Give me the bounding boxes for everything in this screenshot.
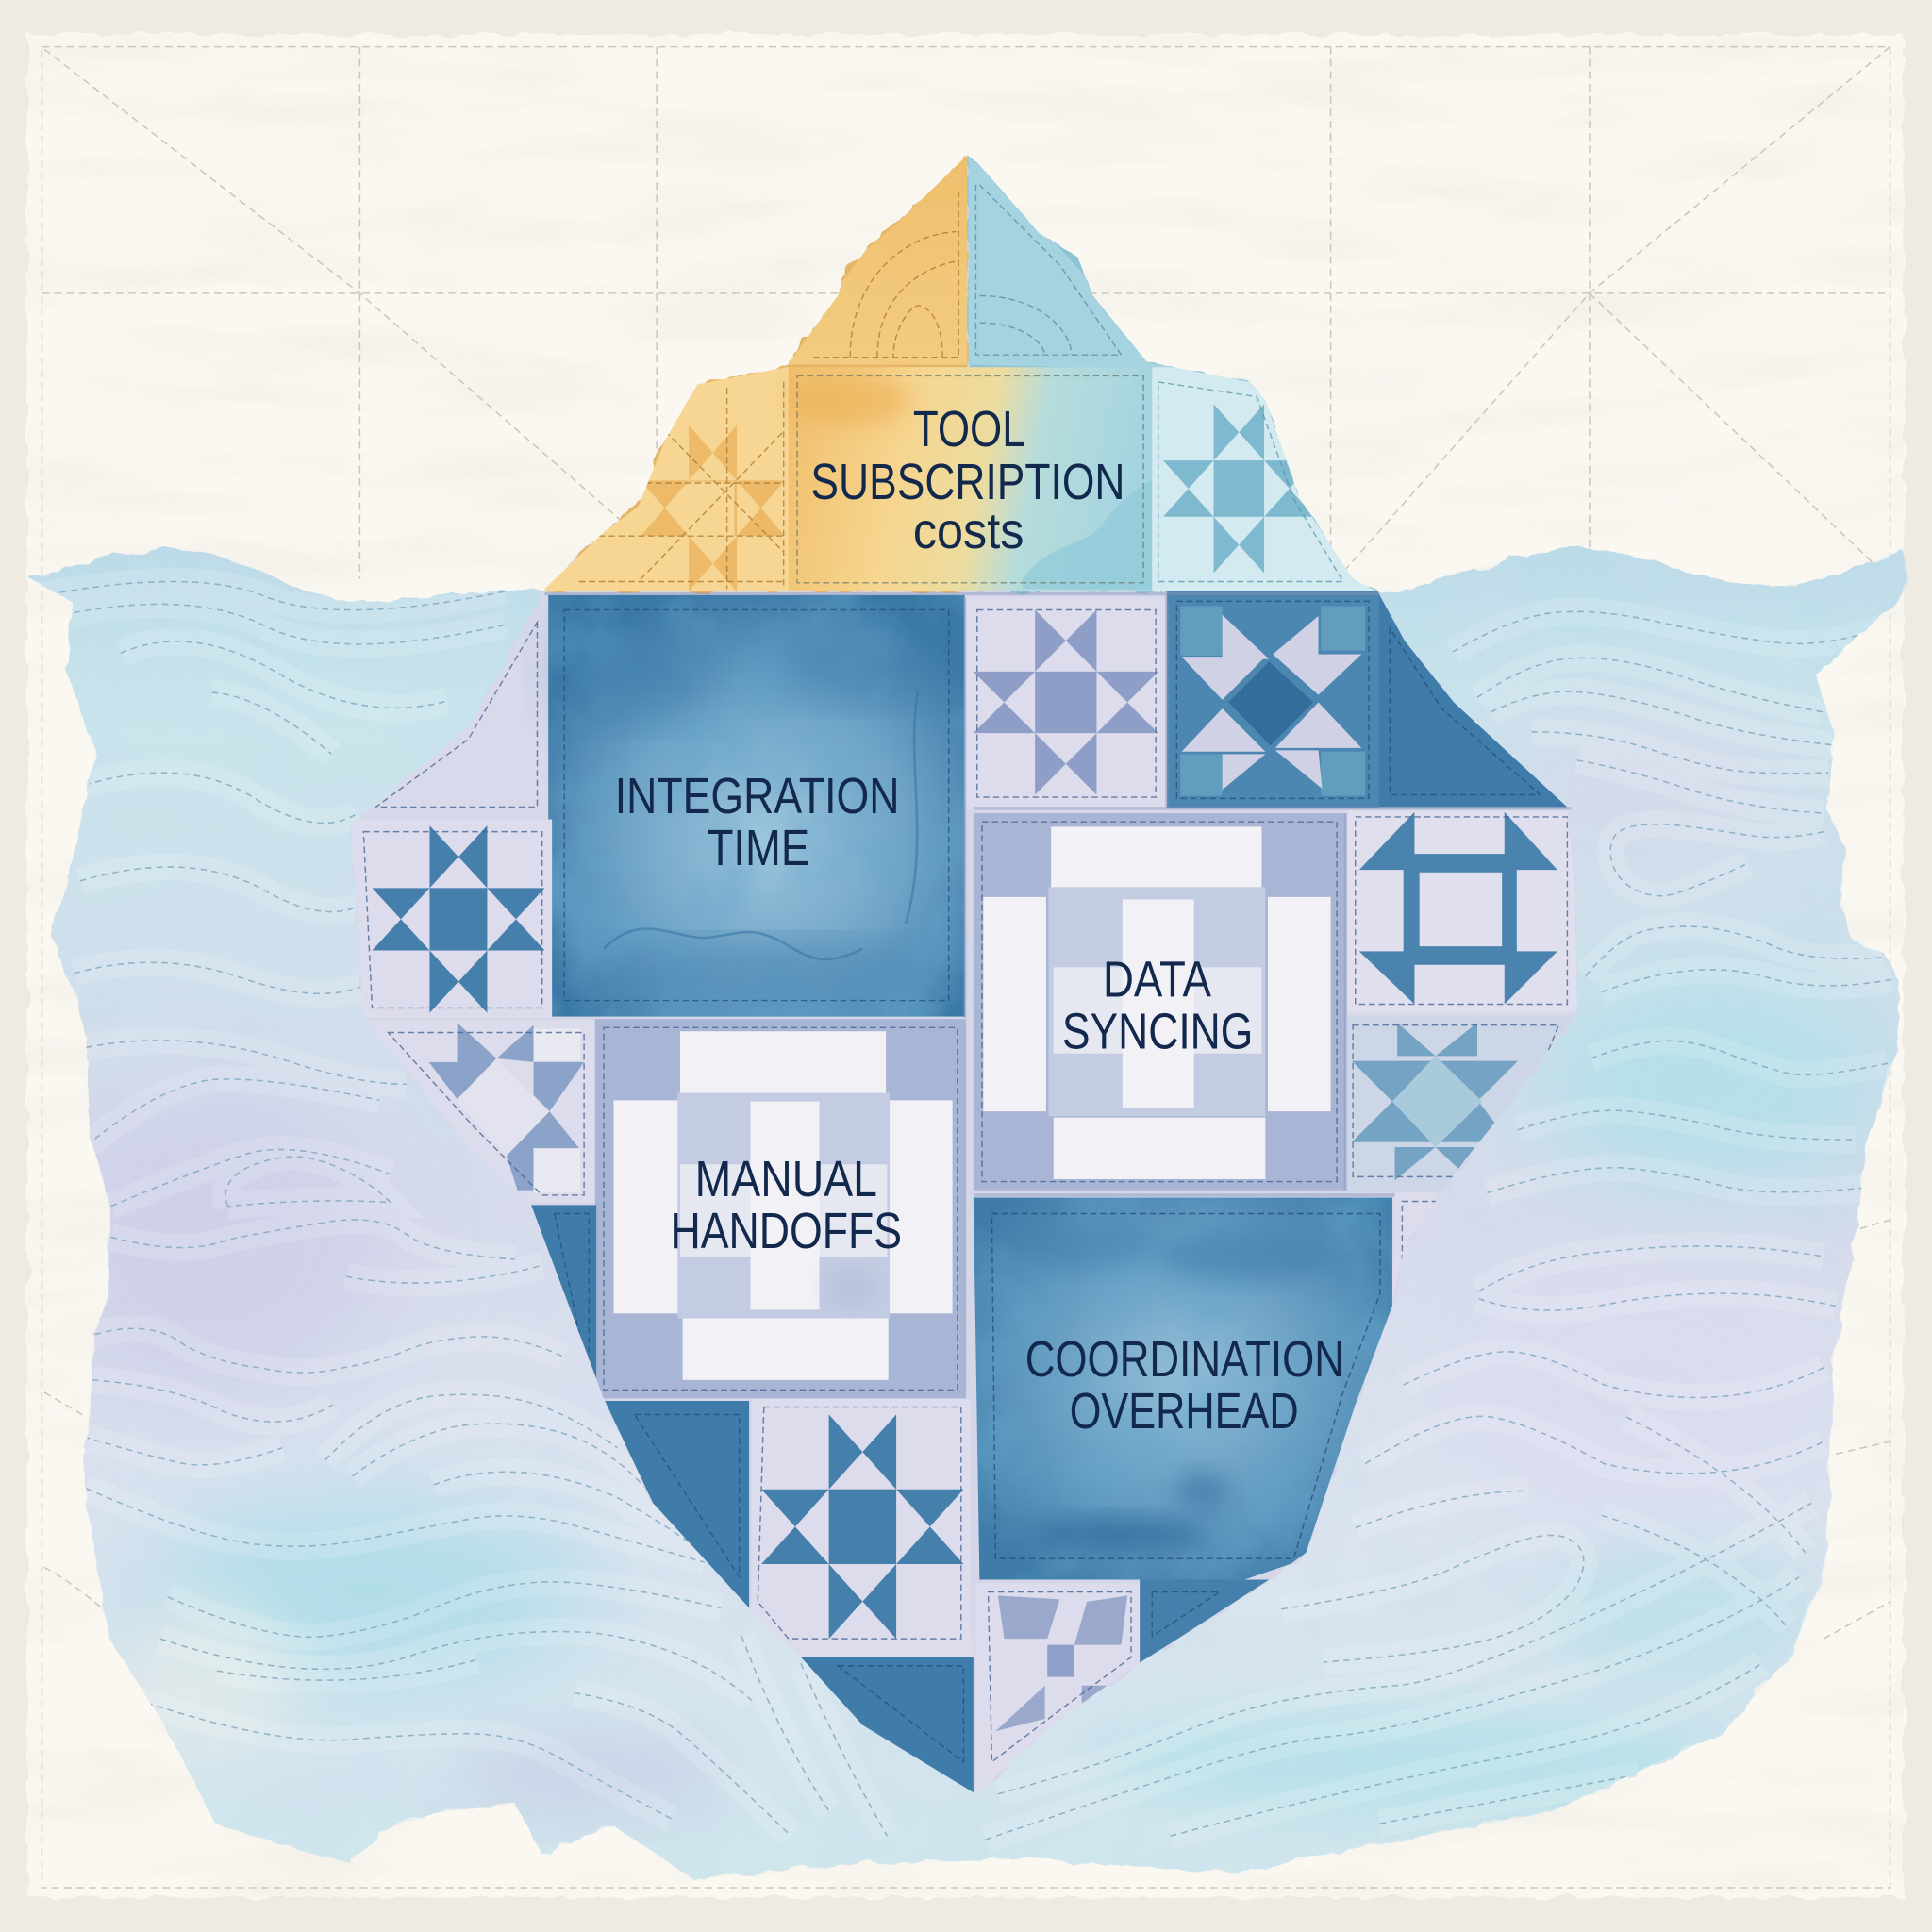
block: small star lower left — [363, 1020, 594, 1203]
label: integration time — [615, 769, 899, 876]
label: coordination overhead: COORDINATION — [1025, 1332, 1344, 1388]
block: dark bottom tip — [801, 1657, 974, 1794]
label: integration time: TIME — [708, 821, 809, 876]
label: data syncing: DATA — [1103, 953, 1211, 1008]
tip: centre label block — [789, 367, 1152, 591]
tip: blue peak — [969, 148, 1171, 370]
block: dark triangle lower left — [530, 1205, 604, 1398]
block: lower right triangle — [1392, 1192, 1478, 1312]
block seams — [544, 591, 1571, 1195]
block: dark star top — [1167, 591, 1379, 808]
label: manual handoffs: HANDOFFS — [671, 1204, 902, 1259]
label: data syncing: SYNCING — [1062, 1005, 1253, 1060]
block: bottom star — [740, 1398, 974, 1657]
label: manual handoffs — [671, 1152, 902, 1259]
block: coordination overhead — [974, 1198, 1392, 1579]
block: hourglass right — [1348, 810, 1577, 1013]
label: tool subscription costs: SUBSCRIPTION — [810, 455, 1124, 510]
block: dark triangle bottom left — [601, 1401, 749, 1607]
tip: pale blue star block — [1152, 367, 1398, 591]
label: manual handoffs: MANUAL — [695, 1152, 877, 1208]
iceberg base fabric — [351, 157, 1577, 1794]
block: data syncing — [974, 813, 1345, 1191]
tip: orange peak — [788, 157, 968, 365]
block: dark bottom right triangle — [1140, 1579, 1269, 1663]
label: coordination overhead: OVERHEAD — [1070, 1384, 1299, 1440]
lavender side triangle — [368, 620, 538, 811]
label: tool subscription costs — [810, 402, 1124, 559]
label: data syncing — [1062, 953, 1253, 1060]
block: bottom flower star — [975, 1583, 1140, 1794]
block: star white top — [965, 597, 1167, 809]
iceberg — [351, 148, 1577, 1794]
label: tool subscription costs: TOOL — [913, 402, 1025, 458]
label: tool subscription costs: costs — [913, 504, 1024, 559]
block: integration time — [548, 595, 965, 1017]
tip: orange star block — [530, 367, 789, 591]
block: manual handoffs — [595, 1019, 966, 1398]
block: dark corner triangle — [1379, 591, 1567, 808]
block: faded star right — [1345, 1017, 1577, 1191]
water — [25, 542, 1911, 1885]
block: star left — [351, 820, 552, 1018]
label: coordination overhead — [1025, 1332, 1344, 1440]
label: integration time: INTEGRATION — [615, 769, 899, 824]
